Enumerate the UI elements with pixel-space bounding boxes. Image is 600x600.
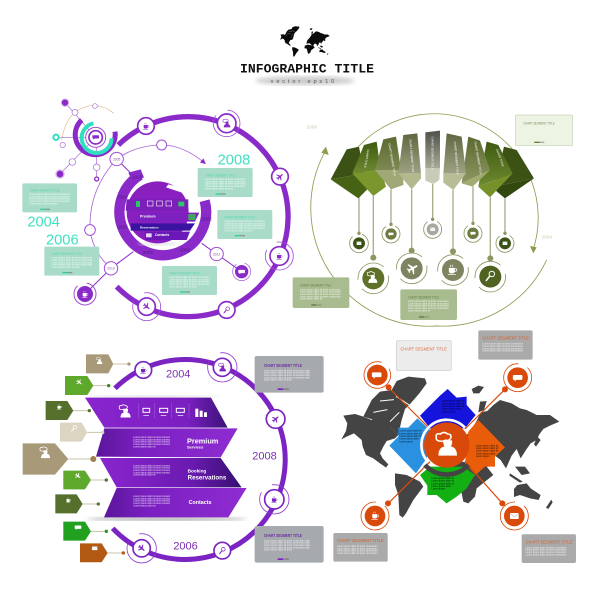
text box: bottom: Lorem ipsum dolor sit amet consectetur — [169, 276, 210, 279]
pendant icons — [350, 218, 514, 294]
block labels — [363, 137, 505, 176]
text box: right upper: CHART SEGMENT TITLE — [205, 173, 236, 177]
diamond: green: Lorem ipsum dolor sit — [432, 477, 454, 480]
diamond: orange — [465, 420, 505, 475]
text box: right middle — [217, 210, 272, 239]
text box: lower right: Lorem ipsum dolor sit amet consectetur adip — [264, 542, 310, 545]
panel: olive arc with 3D blocks — [293, 114, 573, 326]
text box: bottom: Lorem ipsum dolor sit amet — [169, 285, 197, 288]
ribbon body text: Lorem ipsum dolor sit amet consect — [133, 495, 170, 498]
ribbon body text — [133, 436, 170, 507]
text box: left lower: Lorem ipsum dolor sit amet — [52, 266, 80, 269]
connector lines — [85, 159, 242, 294]
ring year labels: 2002 — [143, 250, 153, 255]
diamond: blue: Lorem ipsum dolor — [442, 408, 461, 411]
text box: left lower: CHART SEGMENT TITLE — [52, 252, 83, 256]
year 2008: 2008 — [218, 153, 250, 169]
text box: left lower: Lorem ipsum dolor sit amet consectetur — [52, 259, 93, 262]
text box: top right: CHART SEGMENT TITLE — [482, 336, 530, 342]
diamond: orange: Lorem ipsum dolor sit — [476, 444, 499, 447]
ribbon header icons — [119, 403, 207, 418]
panel: purple spiral timeline — [22, 99, 293, 321]
ribbon body text: Lorem ipsum dolor sit amet consect — [133, 471, 170, 474]
reservations label — [188, 469, 227, 482]
tag: olive — [46, 401, 91, 420]
ribbon shadows — [87, 396, 247, 521]
year 2004: 2004 — [27, 215, 60, 231]
reservations label: Booking — [188, 469, 206, 474]
diamond: light blue: Lorem ipsum dolor — [399, 438, 419, 441]
panel: world map diagram — [333, 330, 576, 563]
ring icon nodes — [127, 353, 289, 563]
text box: left upper: Lorem ipsum dolor sit amet consectetur — [29, 195, 70, 198]
ribbon body text: Lorem ipsum dolor sit amet consect — [133, 436, 170, 439]
central disc: Premium — [140, 215, 156, 219]
diamond: blue: Lorem ipsum dolor sit — [442, 402, 465, 405]
text box: bottom right: Lorem ipsum dolor sit amet consectetur — [526, 546, 567, 549]
premium label: Premium — [187, 437, 219, 446]
text box: lower right: Lorem ipsum dolor sit amet consectetur adip — [264, 544, 310, 547]
diamond: light blue: Lorem ipsum — [399, 440, 413, 443]
central disc: Reservations — [140, 225, 159, 229]
text box: left lower: Lorem ipsum dolor sit amet consectetur — [52, 261, 93, 264]
ribbon body text: Lorem ipsum dolor sit amet consect — [133, 467, 170, 470]
text box: bottom right: Lorem ipsum dolor sit amet consectetur — [526, 553, 567, 556]
ribbon body text: Lorem ipsum dolor sit amet consect — [133, 469, 170, 472]
heading: INFOGRAPHIC TITLE — [240, 62, 374, 77]
text box: lower right: Lorem ipsum dolor sit amet consectetur adip — [264, 546, 310, 549]
text box: right middle: Lorem ipsum dolor sit amet consectetur — [224, 227, 265, 230]
central disc — [126, 181, 199, 246]
tag: cream — [60, 423, 104, 442]
ring year labels: 2002 — [117, 195, 128, 200]
outer ring — [117, 117, 288, 317]
text box: top right: Lorem ipsum dolor sit amet consectetur — [482, 345, 523, 348]
diamond: light blue: Lorem ipsum dolor sit — [399, 432, 422, 435]
text box: right middle: Lorem ipsum dolor sit amet — [224, 229, 253, 232]
icon: world map — [280, 26, 330, 57]
text box: upper right: Lorem ipsum dolor sit amet consectetur adip — [264, 372, 310, 375]
central disc: Contacts — [155, 233, 169, 237]
subtitle: vector eps10 — [271, 79, 337, 85]
diamond: light blue: Lorem ipsum dolor sit — [399, 430, 422, 433]
text box: right middle: CHART SEGMENT TITLE — [224, 215, 255, 219]
text box: lower right: Lorem ipsum dolor sit amet consectetur adip — [264, 539, 310, 542]
tag: olive second — [55, 494, 100, 513]
year 2006: 2006 — [173, 540, 198, 552]
text box: left upper — [22, 183, 77, 212]
text box: right upper: Lorem ipsum dolor sit amet consectetur — [205, 185, 246, 188]
text box: top right — [515, 115, 573, 146]
badge: top right — [502, 364, 532, 392]
diamond: blue: Lorem ipsum dolor sit — [442, 400, 465, 403]
diamond: green: Lorem ipsum dolor sit — [432, 480, 454, 483]
text box: left lower: Lorem ipsum dolor sit amet consectetur — [52, 264, 93, 267]
text box: bottom: Lorem ipsum dolor sit amet consectetur — [408, 305, 449, 308]
year 2008: 2008 — [252, 450, 277, 462]
text box: bottom: Lorem ipsum dolor sit amet consectetur — [169, 283, 210, 286]
text box: bottom left — [333, 533, 388, 562]
text box: top centre — [396, 341, 451, 371]
ribbon body text: Lorem ipsum dolor sit — [133, 474, 156, 477]
tag: orange — [80, 543, 125, 562]
text box: right middle: Lorem ipsum dolor sit amet consectetur — [224, 225, 265, 228]
text box: bottom — [400, 289, 457, 320]
badge: bottom left — [361, 500, 391, 530]
text box: bottom: Lorem ipsum dolor sit amet consectetur — [169, 281, 210, 284]
text box: bottom left: Lorem ipsum dolor sit amet consectetur — [337, 552, 378, 555]
text box: top right: Lorem ipsum dolor sit amet consectetur — [482, 347, 523, 350]
year labels: 2008 — [307, 125, 317, 130]
tag: bright green — [63, 522, 108, 541]
world map — [341, 377, 559, 518]
text box: bottom right — [522, 534, 576, 563]
year labels — [307, 125, 552, 239]
ribbon bands — [85, 398, 247, 517]
badge: bottom right — [499, 500, 528, 530]
diamond: orange: Lorem ipsum — [476, 455, 490, 458]
text box: left lower: Lorem ipsum dolor sit amet consectetur — [52, 257, 93, 260]
text box: right middle: Lorem ipsum dolor sit amet consectetur — [224, 222, 265, 225]
text box: left upper: Lorem ipsum dolor sit amet consectetur — [29, 193, 70, 196]
block labels: CHART SEGMENT TITLE — [408, 139, 415, 173]
year 2004: 2004 — [166, 369, 190, 381]
text box: lower left: Lorem ipsum dolor sit amet consectetur — [300, 291, 341, 294]
premium label — [187, 437, 219, 450]
text box: right middle: Lorem ipsum dolor sit amet consectetur — [224, 220, 265, 223]
ribbon body text: Lorem ipsum dolor sit amet consect — [133, 502, 170, 505]
tag: tan — [86, 354, 131, 373]
text box: bottom left: CHART SEGMENT TITLE — [337, 538, 384, 544]
reservations label: Reservations — [188, 475, 227, 482]
text box: right upper — [198, 168, 253, 197]
diamond: light blue — [389, 418, 432, 473]
stems — [359, 184, 505, 258]
text box: bottom: Lorem ipsum dolor sit — [408, 309, 431, 312]
text box: upper right: Lorem ipsum dolor sit amet — [264, 379, 292, 382]
text box: left upper: Lorem ipsum dolor sit amet consectetur — [29, 198, 70, 201]
arrow heads — [321, 147, 537, 253]
badge: top left — [364, 362, 392, 390]
arrow head — [200, 158, 206, 164]
text box: upper right: Lorem ipsum dolor sit amet consectetur adip — [264, 374, 310, 377]
block labels: CHART TITLE — [363, 149, 370, 168]
top-left gauge — [53, 99, 115, 181]
contacts label: Contacts — [189, 500, 211, 506]
ribbon body text: Lorem ipsum dolor sit — [133, 445, 156, 448]
node year labels: 2005 — [113, 157, 121, 161]
diamond: green: Lorem ipsum dolor sit — [432, 482, 454, 485]
text box: upper right: CHART SEGMENT TITLE — [264, 363, 302, 368]
thin timeline arcs — [90, 145, 205, 268]
tag: green second — [63, 471, 108, 489]
text box: bottom — [162, 266, 217, 295]
ring icon nodes — [133, 110, 293, 321]
text box: lower left — [293, 277, 349, 308]
block labels: CHART SEGMENT TITLE — [431, 137, 435, 170]
ribbon body text: Lorem ipsum dolor sit amet consect — [133, 438, 170, 441]
text box: bottom right: CHART SEGMENT TITLE — [526, 539, 573, 545]
node year labels: 2010 — [107, 267, 115, 271]
ribbon body text: Lorem ipsum dolor sit amet consect — [133, 464, 170, 467]
text box: upper right: Lorem ipsum dolor sit amet consectetur adip — [264, 369, 310, 372]
text box: right upper: Lorem ipsum dolor sit amet consectetur — [205, 180, 246, 183]
central badge — [421, 420, 469, 475]
outer ring — [113, 360, 285, 560]
icon: cup badge — [74, 283, 96, 305]
text box: top right: Lorem ipsum dolor sit amet consectetur — [482, 343, 523, 346]
diamond: light blue: Lorem ipsum dolor sit — [399, 435, 422, 438]
ring year labels: 2002 — [201, 217, 212, 222]
tag connectors — [68, 364, 129, 553]
premium label: Services — [187, 445, 204, 450]
text box: lower right: CHART SEGMENT TITLE — [264, 533, 302, 538]
text box: left lower — [44, 247, 99, 276]
diamond: blue — [420, 389, 476, 428]
tag: large tan — [23, 443, 96, 475]
ring year labels: 2002 — [180, 247, 191, 252]
diamond: orange: Lorem ipsum dolor sit — [476, 447, 499, 450]
ribbon body text: Lorem ipsum dolor sit amet consect — [133, 500, 170, 503]
node year labels: 2012 — [213, 252, 220, 256]
arc lines — [311, 114, 547, 326]
text box: bottom: CHART SEGMENT TITLE — [408, 295, 440, 299]
diamond: green: Lorem ipsum — [432, 488, 445, 491]
block labels: CHART SEGMENT TITLE — [387, 143, 397, 176]
text box: right upper: Lorem ipsum dolor sit amet — [205, 187, 233, 190]
text box: bottom right: Lorem ipsum dolor sit amet consectetur — [526, 549, 567, 552]
text box: bottom: Lorem ipsum dolor sit amet consectetur — [408, 302, 449, 305]
text box: lower left: Lorem ipsum dolor sit — [300, 298, 323, 301]
text box: right upper: Lorem ipsum dolor sit amet consectetur — [205, 183, 246, 186]
diamond: green: Lorem ipsum dolor — [432, 485, 451, 488]
text box: top centre: CHART SEGMENT TITLE — [400, 346, 448, 352]
text box: lower right: Lorem ipsum dolor sit amet — [264, 549, 292, 552]
diamond: blue: Lorem ipsum — [442, 410, 456, 413]
year 2006: 2006 — [46, 233, 79, 249]
connector lines — [388, 387, 505, 503]
text box: top right: Lorem ipsum dolor sit amet consectetur — [482, 350, 523, 353]
tag: green — [65, 376, 110, 395]
text box: left upper: Lorem ipsum dolor sit amet — [29, 202, 58, 205]
block labels: CHART TITLE — [495, 148, 505, 167]
text box: bottom right: Lorem ipsum dolor sit amet consectetur — [526, 551, 567, 554]
text box: top right: CHART SEGMENT TITLE — [523, 121, 555, 125]
text box: bottom: CHART SEGMENT TITLE — [169, 271, 200, 275]
diamond: orange: Lorem ipsum dolor sit — [476, 450, 499, 453]
text box: lower left: Lorem ipsum dolor sit amet consectetur — [300, 288, 341, 291]
block labels: CHART SEGMENT TITLE — [453, 141, 460, 175]
icon: chat badge — [233, 263, 251, 281]
diamond: orange: Lorem ipsum dolor — [476, 452, 495, 455]
text box: bottom left: Lorem ipsum dolor sit amet consectetur — [337, 550, 378, 553]
ribbon body text: Lorem ipsum dolor sit amet consect — [133, 441, 170, 444]
ribbon body text: Lorem ipsum dolor sit amet consect — [133, 497, 170, 500]
text box: lower right — [255, 526, 324, 563]
text box: right upper: Lorem ipsum dolor sit amet consectetur — [205, 178, 246, 181]
inner ring tab — [128, 169, 144, 183]
text box: bottom: Lorem ipsum dolor sit amet consectetur — [169, 278, 210, 281]
text box: lower left: CHART SEGMENT TITLE — [300, 283, 332, 287]
diamond: green — [420, 467, 475, 503]
text box: bottom left: Lorem ipsum dolor sit amet consectetur — [337, 545, 378, 548]
blocks — [331, 131, 534, 198]
text box: upper right: Lorem ipsum dolor sit amet consectetur adip — [264, 376, 310, 379]
title block — [240, 26, 374, 85]
text box: lower left: Lorem ipsum dolor sit amet consectetur — [300, 295, 341, 298]
ring year labels: 2002 — [117, 225, 128, 230]
text box: bottom: Lorem ipsum dolor sit amet consectetur — [408, 307, 449, 310]
inner ring — [119, 175, 206, 255]
timeline nodes — [85, 140, 223, 275]
panel: purple ribbon timeline — [23, 353, 324, 563]
year labels: 2004 — [542, 234, 552, 239]
text box: left upper: Lorem ipsum dolor sit amet consectetur — [29, 200, 70, 203]
text box: bottom: Lorem ipsum dolor sit amet consectetur — [408, 300, 449, 303]
text box: lower left: Lorem ipsum dolor sit amet consectetur — [300, 293, 341, 296]
text box: top right — [478, 330, 533, 360]
ribbon body text: Lorem ipsum dolor sit — [133, 504, 156, 507]
ribbon body text: Lorem ipsum dolor sit amet consect — [133, 443, 170, 446]
node year labels — [107, 157, 220, 271]
block labels: CHART SEGMENT TITLE — [473, 141, 483, 175]
diamond: blue: Lorem ipsum dolor sit — [442, 405, 465, 408]
ring year labels — [117, 175, 212, 255]
text box: upper right — [255, 356, 324, 393]
text box: left upper: CHART SEGMENT TITLE — [29, 188, 60, 192]
ring year labels: 2002 — [132, 175, 143, 180]
text box: bottom left: Lorem ipsum dolor sit amet consectetur — [337, 547, 378, 550]
